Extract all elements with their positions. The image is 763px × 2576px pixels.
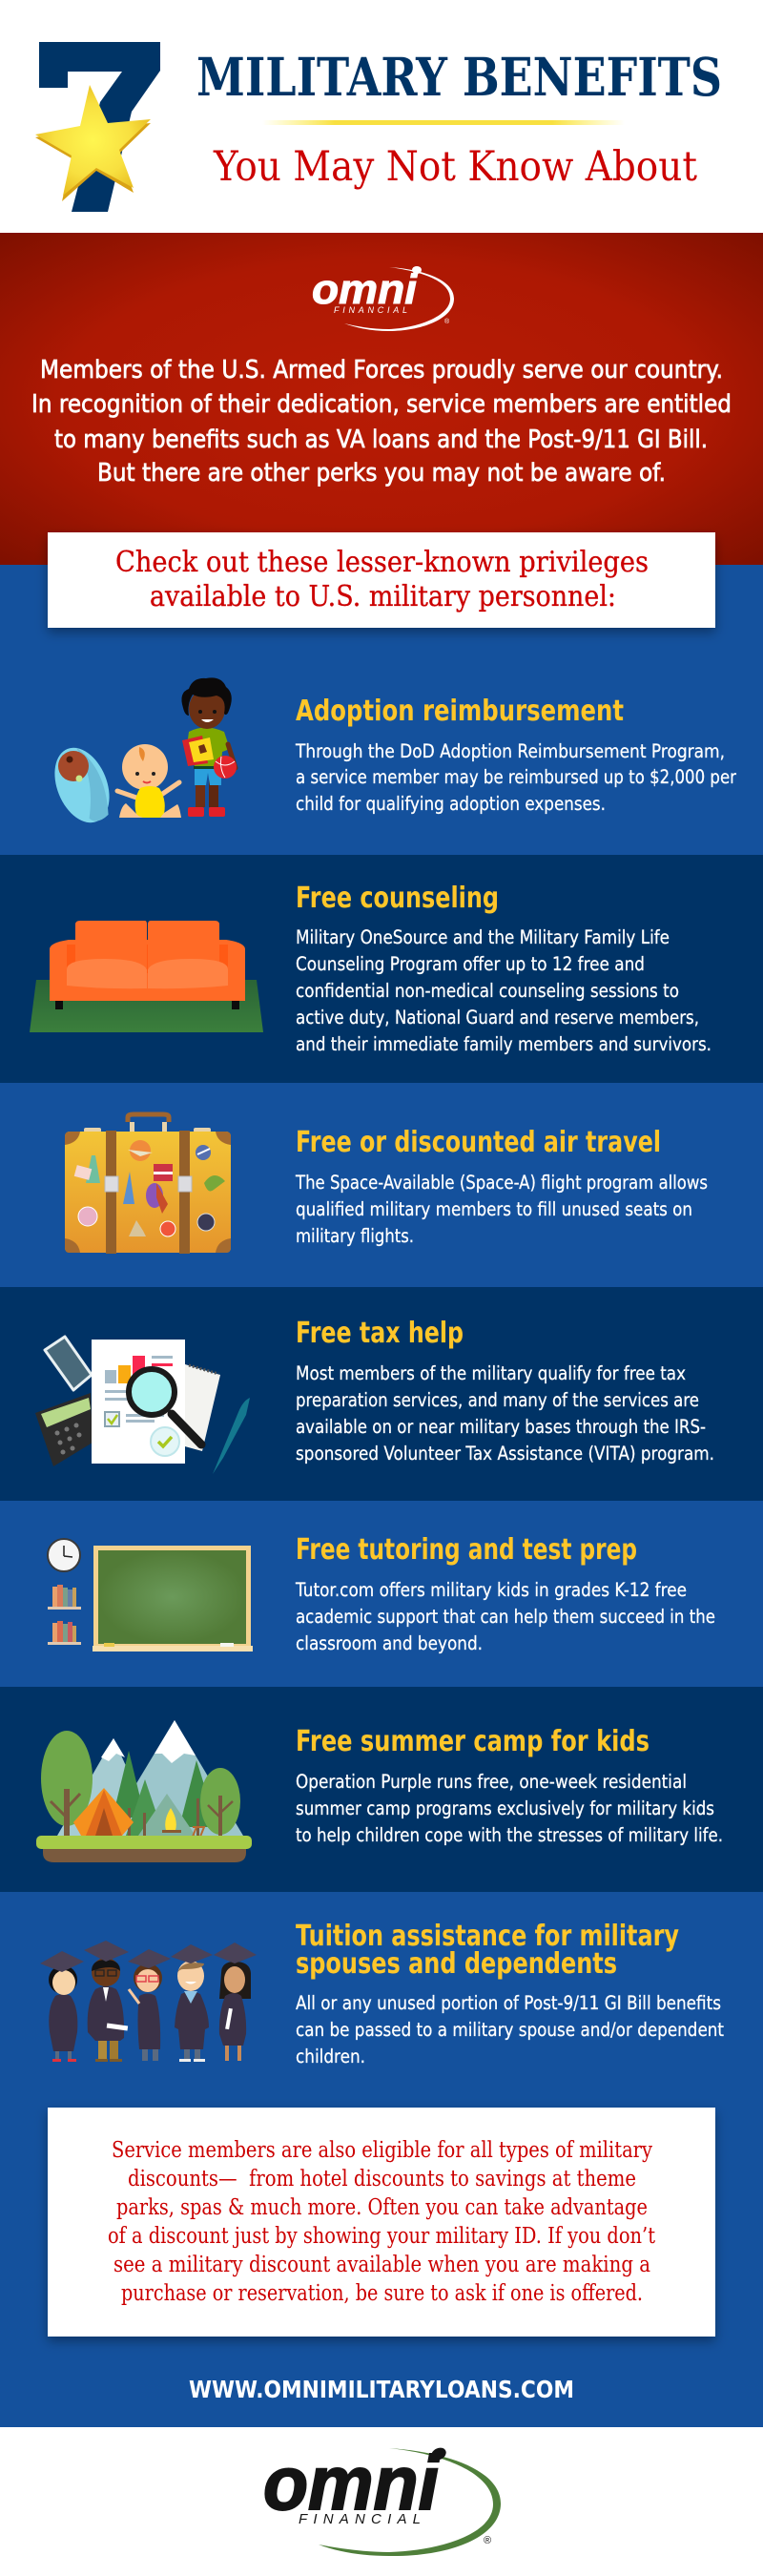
footer: omni logo: ®	[484, 2535, 491, 2546]
callout: military discounts: purchase or reservation, be sure to ask if one is offered.	[121, 2279, 643, 2306]
icon: numeral seven	[39, 42, 160, 212]
panel: summer camp	[0, 1687, 763, 1892]
graduate two	[84, 1941, 129, 2062]
icon: stickers	[74, 1140, 225, 1236]
body text	[296, 926, 711, 1055]
body text	[296, 1992, 724, 2067]
body text: Tutor.com offers military kids in grades K-12 free	[295, 1579, 687, 1601]
panel: adoption reimbursement	[0, 649, 763, 855]
panel: tuition assistance	[0, 1892, 763, 2108]
intro text: But there are other perks you may not be aware of.	[97, 459, 666, 488]
graduate five	[214, 1942, 257, 2061]
panel: free counseling	[0, 855, 763, 1083]
icon: suitcase with stickers	[65, 1114, 231, 1254]
heading: Tuition assistance for military	[296, 1920, 679, 1953]
callout: military discounts: discounts— from hotel discounts to savings at theme	[128, 2165, 636, 2192]
body text: military flights.	[296, 1225, 414, 1247]
icon: tax documents	[35, 1337, 250, 1474]
panel: tutoring	[0, 1501, 763, 1687]
callout: check out these privileges: Check out these lesser-known privileges	[115, 546, 649, 579]
body text: Operation Purple runs free, one-week residential	[296, 1771, 687, 1793]
subtitle: You May Not Know About	[213, 143, 697, 191]
body text	[296, 1362, 714, 1465]
website address: WWW.OMNIMILITARYLOANS.COM	[189, 2376, 574, 2403]
body text: Counseling Program offer up to 12 free and	[296, 953, 645, 975]
logo: omni white: omni	[312, 266, 418, 313]
icon: five graduates	[40, 1941, 257, 2062]
callout: military discounts: of a discount just by showing your military ID. If you don’t	[108, 2222, 655, 2249]
panel: red intro	[0, 233, 763, 565]
callout: military discounts: see a military discount available when you are making a	[113, 2251, 650, 2277]
body text: Most members of the military qualify for free tax	[296, 1362, 686, 1384]
graduate four	[171, 1944, 213, 2062]
body text: active duty, National Guard and reserve members,	[296, 1007, 699, 1028]
logo: omni white: ®	[444, 318, 450, 325]
heading: Free tax help	[296, 1317, 464, 1350]
body text	[295, 1172, 708, 1247]
body text	[295, 740, 737, 815]
footer: omni logo: FINANCIAL	[299, 2511, 421, 2527]
callout: check out these privileges	[48, 532, 715, 628]
background: blue lower page	[0, 565, 763, 2427]
icon: gold star	[35, 85, 151, 201]
panel: air travel	[0, 1083, 763, 1287]
body text: child for qualifying adoption expenses.	[296, 793, 606, 815]
callout: military discounts: parks, spas & much more. Often you can take advantage	[116, 2193, 648, 2220]
header: title area	[0, 0, 763, 233]
callout: military discounts: Service members are also eligible for all types of military	[112, 2136, 653, 2163]
body text: available on or near military bases through the IRS-	[296, 1416, 706, 1438]
callout: military discounts	[48, 2108, 715, 2337]
callout: check out these privileges: available to U.S. military personnel:	[150, 580, 616, 613]
footer: omni logo: omni	[263, 2441, 441, 2525]
heading: Free or discounted air travel	[296, 1126, 661, 1159]
graduate one	[40, 1951, 84, 2062]
heading: spouses and dependents	[296, 1947, 617, 1981]
heading: Free tutoring and test prep	[296, 1533, 637, 1567]
body text: children.	[296, 2046, 365, 2067]
graduate three	[128, 1949, 171, 2061]
icon: chalkboard, clock and books	[48, 1539, 253, 1652]
heading	[296, 1920, 679, 1981]
heading: Adoption reimbursement	[296, 695, 624, 728]
panel: free tax help	[0, 1287, 763, 1501]
body text	[296, 1771, 723, 1846]
body text: preparation services, and many of the services are	[296, 1389, 699, 1411]
heading: Free summer camp for kids	[296, 1725, 650, 1758]
heading: Free counseling	[296, 882, 499, 915]
icon: orange sofa on rug	[30, 921, 263, 1032]
footer: omni logo	[0, 2427, 763, 2576]
intro text	[31, 356, 732, 488]
body text: qualified military members to fill unused seats on	[296, 1198, 692, 1220]
icon: camp scene	[36, 1720, 252, 1862]
body text: confidential non-medical counseling sessions to	[296, 980, 679, 1002]
logo: omni white: FINANCIAL	[334, 305, 407, 315]
logo: omni white	[312, 266, 454, 331]
body text	[295, 1579, 715, 1654]
icon: three children	[45, 677, 237, 831]
body text: Military OneSource and the Military Family Life	[296, 926, 670, 948]
body text: classroom and beyond.	[296, 1632, 483, 1654]
